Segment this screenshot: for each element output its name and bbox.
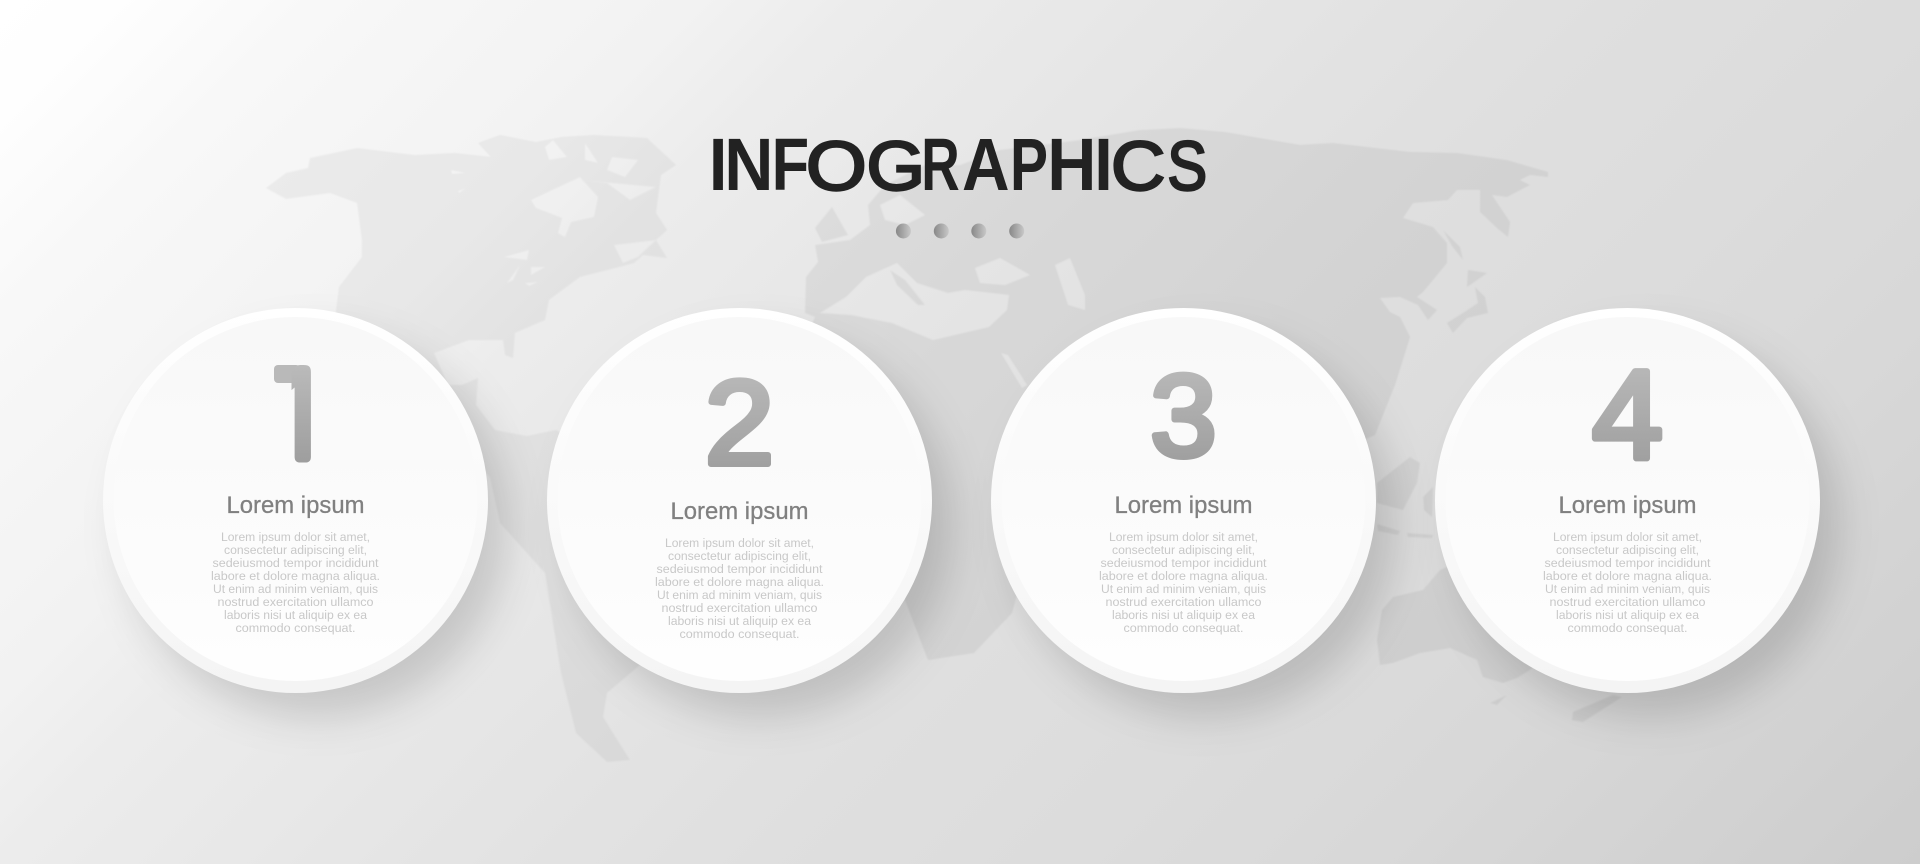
panel: step 2: [547, 308, 952, 717]
body text: commodo consequat.: [1567, 621, 1688, 635]
body text: Ut enim ad minim veniam, quis: [1545, 582, 1710, 596]
title: O: [806, 127, 867, 205]
number 1: [274, 365, 311, 462]
body text: [1543, 530, 1712, 635]
map: eurasia and africa: [790, 128, 1548, 660]
body text: commodo consequat.: [235, 621, 356, 635]
map: americas: [266, 135, 720, 762]
title: F: [772, 124, 809, 206]
map: borneo and islands: [1377, 457, 1433, 538]
body text: Ut enim ad minim veniam, quis: [213, 582, 378, 596]
body text: commodo consequat.: [1123, 621, 1244, 635]
body text: Lorem ipsum dolor sit amet,: [1109, 530, 1258, 544]
title: G: [866, 128, 925, 205]
body text: Lorem ipsum dolor sit amet,: [665, 536, 814, 550]
body text: [655, 536, 824, 641]
title: C: [1111, 128, 1165, 205]
body text: [1099, 530, 1268, 635]
title: P: [1010, 123, 1048, 206]
heading: Lorem ipsum: [670, 498, 808, 525]
body text: nostrud exercitation ullamco: [662, 601, 818, 615]
body text: labore et dolore magna aliqua.: [1099, 569, 1268, 583]
body text: consectetur adipiscing elit,: [668, 549, 811, 563]
body text: laboris nisi ut aliquip ex ea: [1112, 608, 1255, 622]
heading: Lorem ipsum: [1558, 492, 1696, 519]
map: australia: [1377, 567, 1560, 683]
number 1: 1: [263, 356, 335, 476]
body text: consectetur adipiscing elit,: [224, 543, 367, 557]
body text: labore et dolore magna aliqua.: [211, 569, 380, 583]
title: [709, 123, 1207, 207]
title: N: [724, 124, 773, 207]
body text: consectetur adipiscing elit,: [1112, 543, 1255, 557]
body text: sedeiusmod tempor incididunt: [1100, 556, 1267, 570]
body text: nostrud exercitation ullamco: [218, 595, 374, 609]
map: britain: [815, 207, 848, 242]
body text: nostrud exercitation ullamco: [1550, 595, 1706, 609]
number 2: 2: [705, 355, 774, 489]
body text: sedeiusmod tempor incididunt: [212, 556, 379, 570]
body text: Lorem ipsum dolor sit amet,: [1553, 530, 1702, 544]
body text: Ut enim ad minim veniam, quis: [657, 588, 822, 602]
world map: [266, 128, 1622, 762]
body text: sedeiusmod tempor incididunt: [1544, 556, 1711, 570]
body text: Lorem ipsum dolor sit amet,: [221, 530, 370, 544]
heading: Lorem ipsum: [226, 492, 364, 519]
title: A: [962, 123, 1010, 206]
body text: labore et dolore magna aliqua.: [655, 575, 824, 589]
body text: laboris nisi ut aliquip ex ea: [224, 608, 367, 622]
number 4: 4: [1592, 344, 1663, 485]
map: tasmania and new zealand: [1490, 695, 1622, 722]
body text: nostrud exercitation ullamco: [1106, 595, 1262, 609]
panel: step 3: [991, 308, 1396, 717]
body text: commodo consequat.: [679, 627, 800, 641]
body text: laboris nisi ut aliquip ex ea: [668, 614, 811, 628]
body text: laboris nisi ut aliquip ex ea: [1556, 608, 1699, 622]
panel: step 1: [103, 308, 508, 717]
title: H: [1047, 124, 1096, 207]
title: I: [709, 123, 727, 206]
body text: labore et dolore magna aliqua.: [1543, 569, 1712, 583]
title dots: [896, 224, 1024, 238]
title: I: [1094, 123, 1113, 206]
body text: [211, 530, 380, 635]
title: R: [921, 123, 960, 206]
body text: sedeiusmod tempor incididunt: [656, 562, 823, 576]
number 3: 3: [1150, 351, 1217, 481]
map: japan and sakhalin: [1443, 230, 1488, 333]
body text: consectetur adipiscing elit,: [1556, 543, 1699, 557]
panel: step 4: [1435, 308, 1840, 717]
heading: Lorem ipsum: [1114, 492, 1252, 519]
title: S: [1167, 127, 1207, 205]
body text: Ut enim ad minim veniam, quis: [1101, 582, 1266, 596]
